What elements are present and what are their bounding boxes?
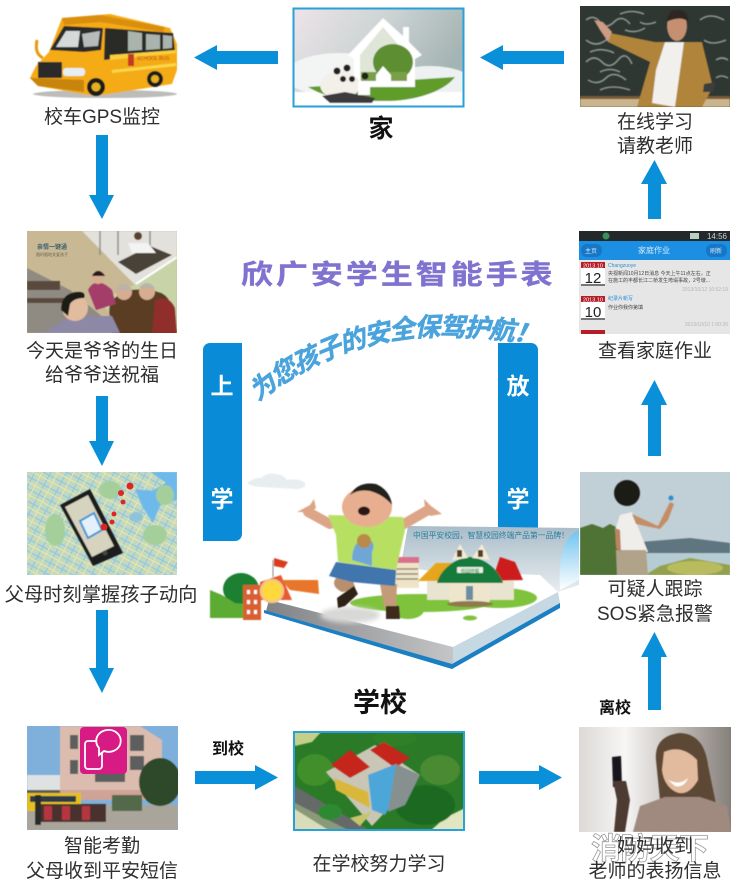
arrow: woman to boy <box>641 632 667 710</box>
bar: going to school: 学 <box>210 486 234 512</box>
label: teacher praise: 妈妈收到 <box>617 835 693 857</box>
bar: leaving school: 放 <box>506 373 530 399</box>
boy arms <box>308 512 330 524</box>
photo: homework app: 2013.10 <box>583 264 603 270</box>
small school on the left <box>210 558 319 620</box>
small building <box>395 557 419 588</box>
arrow: boy to homework <box>641 380 667 456</box>
photo: map and phone <box>27 472 177 575</box>
label: attendance <box>26 835 178 882</box>
photo: teacher <box>580 6 730 107</box>
label: check homework: 查看家庭作业 <box>598 340 712 362</box>
frame: school border <box>294 732 464 830</box>
photo: homework app: 家庭作业 <box>638 245 670 255</box>
cartoon boy <box>297 483 442 619</box>
photo: homework app <box>579 231 730 334</box>
bar: going to school: 上 <box>210 373 234 399</box>
heading: home: 家 <box>368 115 394 143</box>
book right side <box>453 592 560 665</box>
label: grandpa birthday <box>26 340 178 386</box>
book back wall <box>400 526 579 592</box>
label: arrive school: 到校 <box>212 739 244 758</box>
photo: family call: 随时随地关爱孩子 <box>36 251 68 257</box>
arrow: home to bus <box>194 45 278 70</box>
label: grandpa birthday: 今天是爷爷的生日 <box>26 340 178 362</box>
photo: school bus: SCHOOL BUS <box>137 56 170 62</box>
book blue spine <box>264 603 560 669</box>
boy head <box>342 487 392 527</box>
lawn <box>350 588 537 620</box>
arrow: school to woman <box>479 765 562 790</box>
photo: homework app: 作业你我你第填 <box>608 304 643 311</box>
photo: school bus <box>30 14 177 98</box>
photo: woman with phone <box>579 727 731 832</box>
photo: homework app: 10 <box>585 304 601 321</box>
label: SOS: SOS紧急报警 <box>597 603 713 625</box>
bar: leaving school <box>498 343 538 530</box>
bar: going to school <box>203 343 242 541</box>
label: online learning: 在线学习 <box>617 111 693 133</box>
curled page <box>560 530 579 590</box>
label: teacher praise <box>588 835 722 882</box>
photo: homework app: 14:56 <box>707 232 728 241</box>
houses <box>418 544 523 607</box>
photo: homework app: 2013.10 <box>583 298 603 304</box>
title: product name: 欣广安学生智能手表 <box>241 260 553 290</box>
label: map: 父母时刻掌握孩子动向 <box>5 584 197 606</box>
arrow: family to map <box>89 396 114 466</box>
slogan: curved: 为您孩子的安全保驾护航！ <box>252 314 530 402</box>
boy shirt <box>328 515 405 570</box>
photo: attendance <box>27 726 181 830</box>
arrow: homework to teacher <box>641 160 667 219</box>
boy shorts <box>329 562 396 586</box>
boy right leg and shoe <box>380 584 397 607</box>
photo: family call <box>27 231 177 334</box>
arrow: bus to family <box>89 135 114 219</box>
label: attendance: 智能考勤 <box>64 835 140 857</box>
photo: homework app: 12 <box>585 270 601 287</box>
label: study at school: 在学校努力学习 <box>312 853 446 875</box>
label: attendance: 父母收到平安短信 <box>26 860 178 882</box>
photo: homework app: 央视新闻10月12日消息 今天上午11点左右，正 <box>608 270 711 277</box>
book left side <box>266 600 453 665</box>
arrow: teacher to home <box>480 45 564 70</box>
boy left leg and shoe <box>334 578 356 592</box>
label: SOS: 可疑人跟踪 <box>607 578 703 600</box>
label: leaving school: 离校 <box>599 698 631 717</box>
photo: homework app: 2013/10/12 16:52:19 <box>682 287 728 293</box>
label: online learning <box>617 111 693 157</box>
photo: family call: 亲情一键通 <box>37 243 67 251</box>
arrow: map to attendance <box>89 610 114 693</box>
photo: homework app: 纪录片新写 <box>608 295 633 302</box>
heading: school: 学校 <box>353 688 407 718</box>
label: teacher praise: 老师的表扬信息 <box>588 860 722 882</box>
photo: homework app: 刷新 <box>710 247 722 255</box>
photo: homework app: Changzuoye <box>608 263 636 269</box>
arrow: to school <box>195 765 278 790</box>
houses: 校园终端 <box>461 568 479 574</box>
photo: home <box>294 10 462 104</box>
photo: homework app: 2013/10/10 1:00:26 <box>685 322 728 328</box>
watermark: 消防天下 <box>591 833 709 866</box>
photo: boy with watch <box>580 472 730 575</box>
wall tagline: 中国平安校园，智慧校园终端产品第一品牌！ <box>413 530 569 540</box>
illustration: cloud <box>247 474 305 489</box>
shadow under boy <box>320 607 380 623</box>
label: online learning: 请教老师 <box>617 135 693 157</box>
photo: homework app: 主页 <box>585 247 597 255</box>
bar: leaving school: 学 <box>506 486 530 512</box>
label: bus GPS: 校车GPS监控 <box>44 106 160 128</box>
photo: school <box>293 730 465 831</box>
book top page <box>269 566 558 647</box>
label: SOS <box>597 578 713 625</box>
label: grandpa birthday: 给爷爷送祝福 <box>45 364 159 386</box>
frame: home border <box>294 8 464 106</box>
illustration: book with scene <box>210 483 579 669</box>
photo: homework app: 在施工的丰都长江二桥发生垮塌事故，2号墩... <box>608 277 710 284</box>
